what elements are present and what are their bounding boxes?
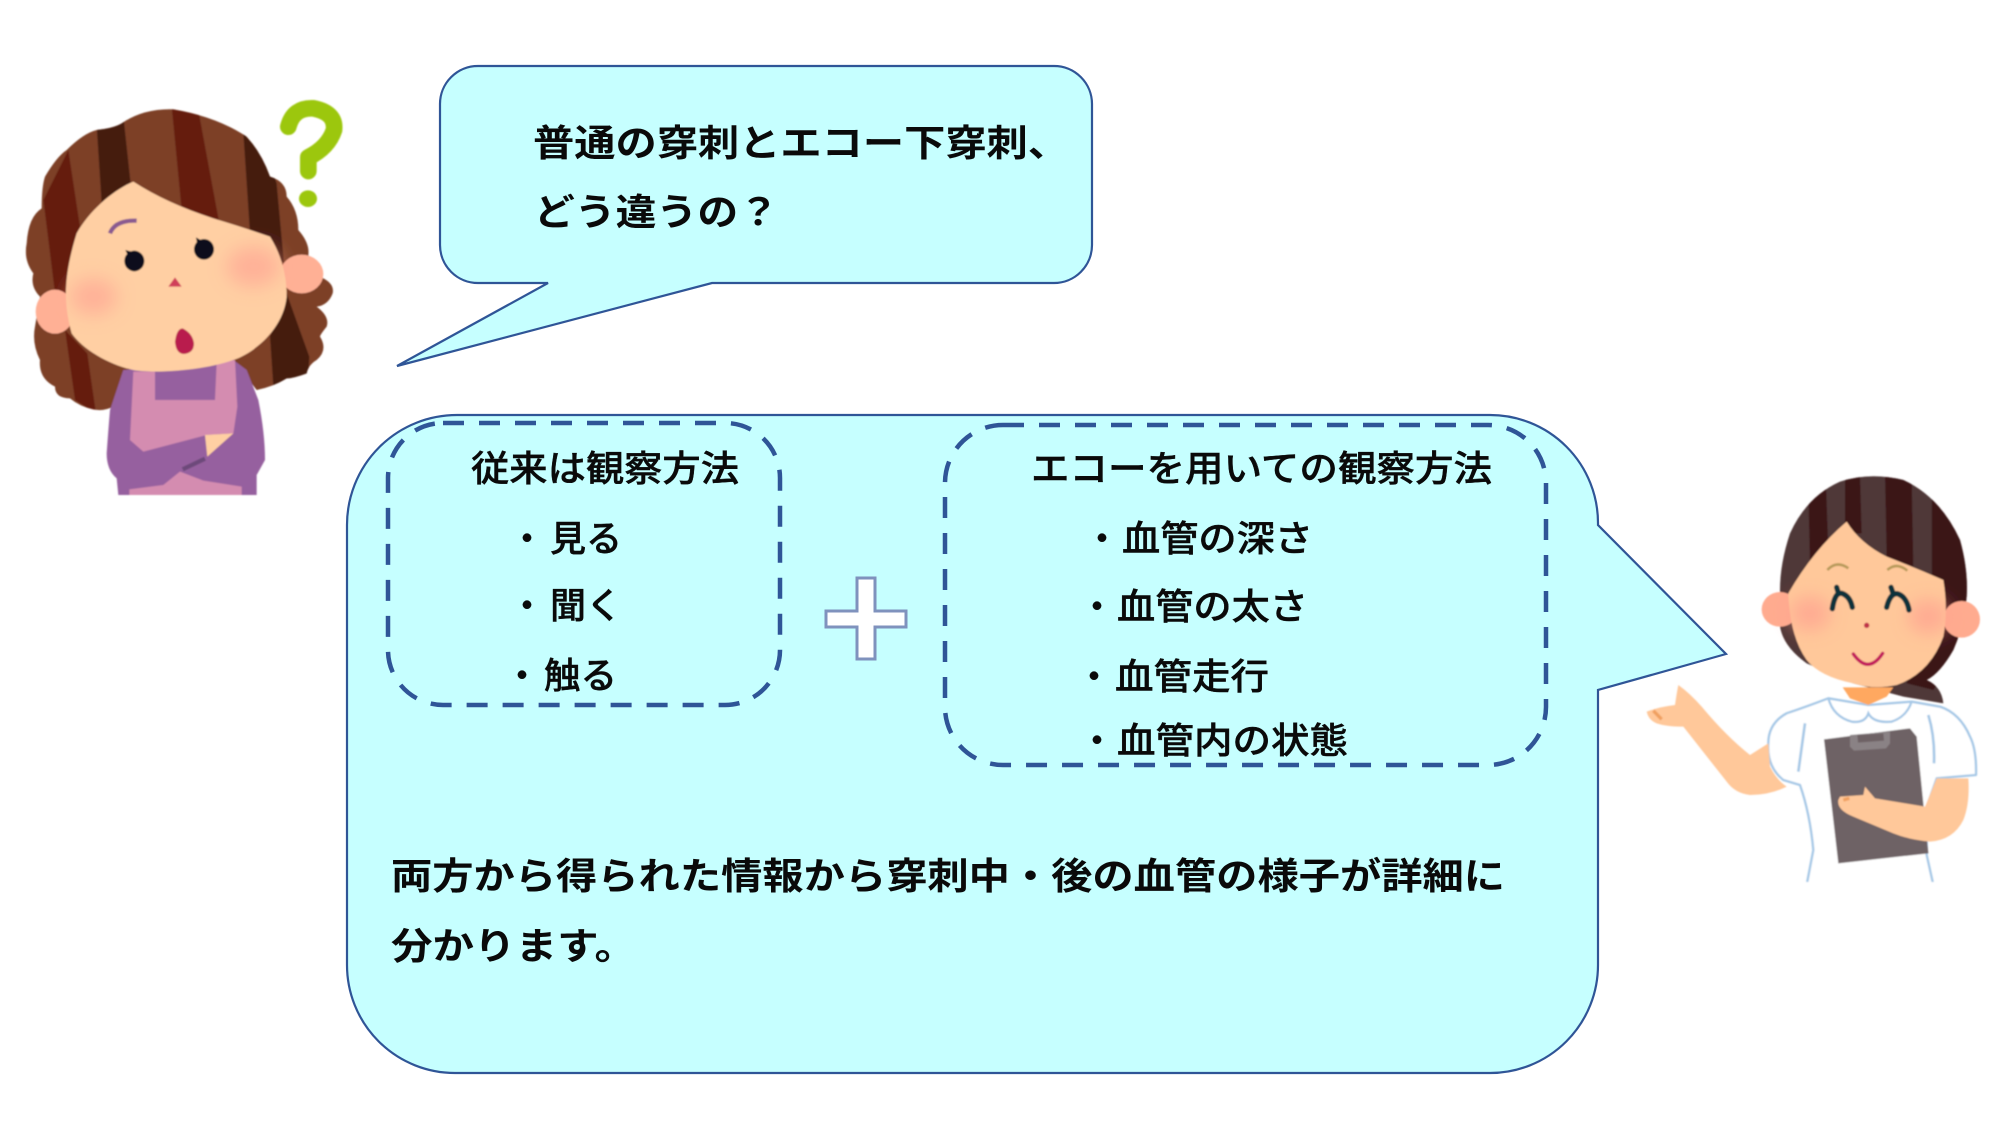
speech bubble: explanation: [347, 415, 1726, 1073]
panel: ultrasound observation: 血管走行: [1115, 656, 1269, 697]
illustration: nurse with clipboard: [1647, 470, 1980, 887]
conclusion text: 分かります。: [391, 926, 636, 967]
panel: ultrasound observation: 血管の太さ: [1117, 586, 1308, 627]
nurse hair: [1773, 470, 1973, 710]
panel: ultrasound observation: 血管の深さ: [1122, 518, 1313, 559]
panel: conventional observation: ・: [504, 655, 540, 696]
panel: ultrasound observation: [945, 425, 1546, 765]
panel: conventional observation: 聞く: [550, 585, 622, 626]
nurse face: [1762, 522, 1980, 705]
panel: conventional observation: [388, 423, 780, 705]
panel: ultrasound observation: ・: [1084, 518, 1120, 559]
panel: conventional observation: 触る: [544, 655, 617, 696]
icon: plus sign: [826, 578, 906, 659]
nurse blouse: [1768, 698, 1976, 887]
woman hair: [20, 103, 340, 417]
panel: ultrasound observation: ・: [1079, 586, 1115, 627]
panel: conventional observation: ・: [509, 585, 545, 626]
panel: ultrasound observation: ・: [1079, 720, 1115, 761]
panel: ultrasound observation: ・: [1076, 656, 1112, 697]
conclusion text: 両方から得られた情報から穿刺中・後の血管の様子が詳細に: [391, 856, 1505, 897]
woman body and apron: [107, 360, 265, 495]
panel: ultrasound observation: 血管内の状態: [1117, 720, 1348, 761]
illustration: worried woman with question mark: [20, 103, 340, 495]
speech bubble: question: [397, 66, 1092, 366]
question text: [533, 123, 1069, 233]
conclusion text: [391, 856, 1505, 967]
panel: ultrasound observation: エコーを用いての観察方法: [1031, 448, 1492, 489]
nurse arms: [1647, 685, 1969, 842]
panel: conventional observation: 見る: [550, 518, 622, 559]
icon: clipboard: [1824, 728, 1928, 863]
question text: どう違うの？: [534, 192, 779, 233]
panel: conventional observation: 従来は観察方法: [471, 448, 739, 489]
question text: 普通の穿刺とエコー下穿刺、: [533, 123, 1069, 164]
woman face: [36, 182, 323, 372]
icon: question mark: [288, 108, 334, 207]
panel: conventional observation: ・: [509, 518, 545, 559]
